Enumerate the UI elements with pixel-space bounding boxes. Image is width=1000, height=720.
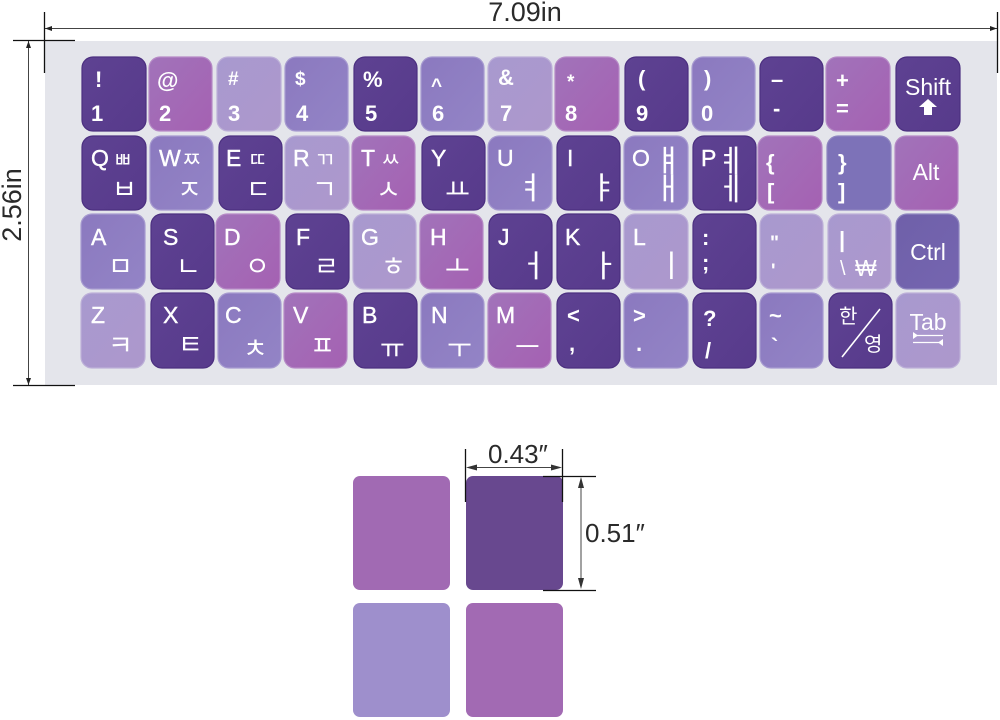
key U (488, 136, 552, 210)
key X: X (163, 302, 178, 328)
key 1 (82, 57, 146, 131)
key I: ㅑ (589, 163, 618, 208)
key 1: 1 (91, 101, 103, 126)
key backslash and won (828, 214, 891, 289)
key C: ㅊ (243, 327, 268, 366)
key Z: Z (91, 302, 105, 328)
key 0: 0 (701, 101, 713, 126)
key Y (422, 136, 485, 210)
key 7 (488, 57, 552, 131)
key less than: , (569, 331, 575, 356)
key G (353, 214, 416, 289)
key D (216, 214, 280, 289)
key minus (760, 57, 823, 131)
key A: ㅁ (108, 245, 133, 284)
key right brace: ] (838, 179, 845, 204)
key K: K (565, 224, 581, 250)
key 7: & (498, 65, 514, 90)
key row 1: number keys (82, 57, 960, 131)
key S: ㄴ (176, 245, 201, 284)
key 9: ( (638, 66, 646, 91)
key 9 (625, 57, 688, 131)
key Hangul/English toggle: 한 (839, 300, 857, 329)
key Z: ㅋ (108, 324, 133, 363)
key quote: ' (771, 261, 776, 282)
key 4: 4 (296, 101, 309, 126)
key W: W (159, 145, 181, 171)
key row 3: ASDF (81, 214, 959, 289)
key left brace: { (766, 150, 775, 175)
key P (693, 136, 756, 210)
key row 4: ZXCV (81, 293, 960, 368)
key C: C (225, 302, 242, 328)
key P: P (701, 145, 716, 171)
key V (284, 293, 347, 368)
key K (557, 214, 620, 289)
key 8 (555, 57, 619, 131)
key O: O (632, 145, 650, 171)
key 5 (354, 57, 417, 131)
key L: ㅣ (657, 241, 686, 286)
key H: ㅗ (445, 245, 470, 284)
key semicolon: : (702, 225, 709, 250)
key quote (760, 214, 823, 289)
key T: ㅅ (376, 168, 401, 207)
key backslash and won: | (839, 227, 845, 252)
key 1: ! (95, 67, 102, 92)
key M: M (496, 302, 515, 328)
key row 2: QWERTY (82, 136, 958, 210)
key L: L (633, 224, 646, 250)
height dimension: 2.56in (0, 40, 75, 386)
key G: G (361, 224, 379, 250)
key equals: + (836, 68, 849, 93)
key equals: = (836, 96, 849, 121)
key greater than: > (633, 303, 646, 328)
key R: R (293, 145, 310, 171)
key tab: Tab (909, 309, 947, 335)
key E: ㄸ (248, 144, 267, 174)
key Hangul/English toggle (829, 293, 892, 368)
key right brace: } (838, 150, 847, 175)
key shift: Shift (905, 74, 952, 100)
key O (624, 136, 688, 210)
swatch height dimension: 0.51 inch (543, 476, 645, 590)
key I (557, 136, 620, 210)
swatch height dimension: 0.51 inch: 0.51″ (585, 518, 645, 548)
key G: ㅎ (381, 245, 406, 284)
key 6 (421, 57, 484, 131)
key O: ㅐ (654, 164, 683, 209)
width dimension: 7.09in (44, 0, 998, 73)
key 2: 2 (159, 101, 171, 126)
key R: ㄲ (315, 144, 334, 174)
key L (624, 214, 688, 289)
key V: V (293, 302, 309, 328)
key M: ㅡ (515, 326, 540, 365)
key 8: 8 (565, 101, 577, 126)
key A: A (91, 224, 107, 250)
key E: E (226, 145, 241, 171)
key 0 (692, 57, 755, 131)
key tilde: ~ (769, 303, 782, 328)
key 2: @ (157, 68, 178, 93)
key minus: - (773, 96, 780, 121)
key 7: 7 (500, 101, 512, 126)
key Q: ㅂ (112, 168, 137, 207)
key question mark (693, 293, 756, 368)
key F (286, 214, 349, 289)
key J (489, 214, 552, 289)
key Q (82, 136, 146, 210)
key greater than (624, 293, 688, 368)
key 3: # (228, 69, 239, 90)
key 6: 6 (432, 101, 444, 126)
swatch width dimension: 0.43 inch (466, 439, 562, 502)
key J: ㅓ (519, 241, 548, 286)
swatch: orchid (466, 603, 563, 717)
key alt: Alt (913, 159, 940, 185)
key 6: ^ (431, 76, 442, 97)
key 4: $ (295, 69, 306, 90)
key B: B (362, 302, 377, 328)
key X (151, 293, 214, 368)
key H (420, 214, 483, 289)
swatch: dark purple (466, 476, 563, 590)
key P: ㅔ (717, 164, 746, 209)
key Z (81, 293, 145, 368)
key left brace: [ (767, 179, 775, 204)
key D: ㅇ (245, 245, 270, 284)
key J: J (498, 224, 510, 250)
key Y: Y (431, 145, 446, 171)
key N: N (431, 302, 448, 328)
key E (219, 136, 282, 210)
key O: ㅒ (654, 136, 683, 181)
key backslash and won: \ (840, 258, 846, 280)
key 5: 5 (365, 101, 377, 126)
key U: ㅕ (516, 163, 545, 208)
key F: ㄹ (314, 245, 339, 284)
key 0: ) (704, 66, 711, 91)
key tilde: ` (771, 334, 778, 359)
key W: ㅈ (177, 168, 202, 207)
key S: S (163, 224, 178, 250)
key semicolon (693, 214, 756, 289)
key P: ㅖ (717, 136, 746, 181)
key less than: < (567, 303, 580, 328)
key S (151, 214, 214, 289)
key shift (896, 57, 960, 131)
key X: ㅌ (178, 323, 203, 362)
key 2 (149, 57, 212, 131)
key E: ㄷ (246, 168, 271, 207)
key C (218, 293, 281, 368)
key A (81, 214, 145, 289)
swatch: magenta (353, 476, 450, 590)
key 5: % (363, 67, 383, 92)
key 8: * (567, 72, 575, 93)
key U: U (497, 145, 514, 171)
key ctrl (896, 214, 959, 289)
key N: ㅜ (447, 327, 472, 366)
key T (352, 136, 415, 210)
key F: F (296, 224, 310, 250)
key Q: ㅃ (113, 144, 132, 174)
key W: ㅉ (182, 144, 201, 174)
key minus: – (771, 67, 783, 92)
key tab (896, 293, 960, 368)
key B (354, 293, 417, 368)
key greater than: . (636, 331, 642, 356)
key W (150, 136, 213, 210)
key V: ㅍ (310, 324, 335, 363)
key equals (826, 57, 890, 131)
key 4 (285, 57, 348, 131)
key ctrl: Ctrl (910, 239, 946, 265)
key tilde (760, 293, 823, 368)
key 9: 9 (636, 101, 648, 126)
key less than (557, 293, 620, 368)
swatch: lavender (353, 603, 450, 717)
key T: T (361, 145, 375, 171)
key 3: 3 (228, 101, 240, 126)
key right brace (827, 136, 891, 210)
key M (488, 293, 551, 368)
key 3 (217, 57, 281, 131)
key Q: Q (91, 145, 109, 171)
key K: ㅏ (590, 241, 619, 286)
key I: I (567, 145, 573, 171)
key N (421, 293, 484, 368)
key semicolon: ; (702, 250, 709, 275)
sticker sheet background panel (45, 41, 997, 385)
key R (285, 136, 349, 210)
key Hangul/English toggle: 영 (864, 328, 882, 357)
key quote: " (770, 233, 779, 254)
key question mark: ? (703, 306, 716, 331)
key question mark: / (705, 338, 711, 363)
key D: D (224, 224, 241, 250)
key Y: ㅛ (445, 168, 470, 207)
key R: ㄱ (312, 168, 337, 207)
swatch width dimension: 0.43 inch: 0.43″ (488, 439, 548, 469)
key backslash and won: ₩ (855, 255, 877, 281)
key alt (895, 136, 958, 210)
key H: H (430, 224, 447, 250)
key T: ㅆ (381, 144, 400, 174)
key B: ㅠ (380, 327, 405, 366)
key left brace (758, 136, 822, 210)
